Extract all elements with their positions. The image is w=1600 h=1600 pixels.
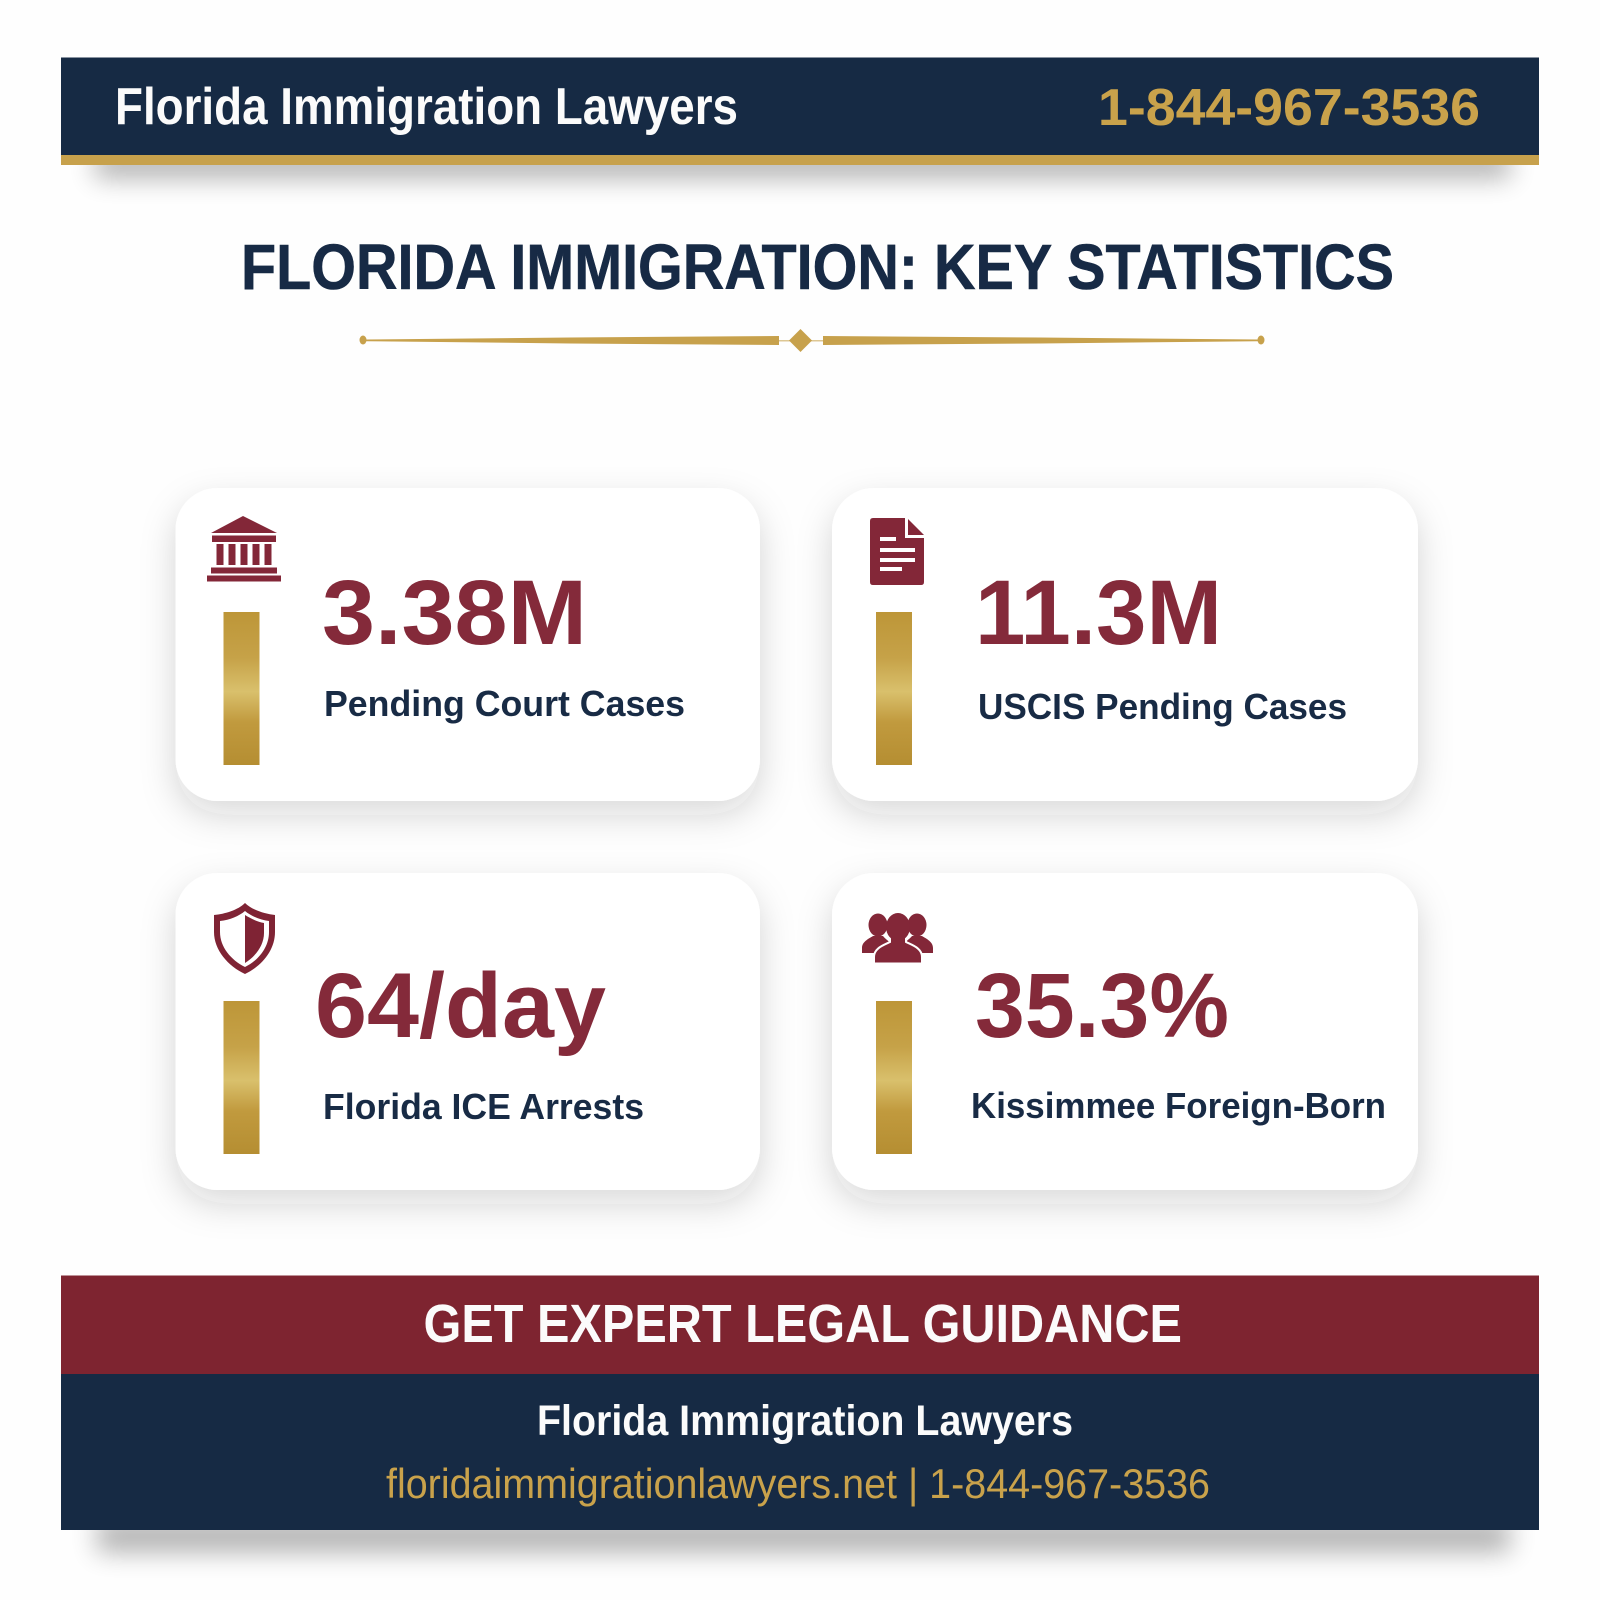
panel: Kissimmee foreign-born bbox=[832, 873, 1418, 1190]
website and phone: floridaimmigrationlawyers.net | 1-844-967-3536 bbox=[386, 1460, 1210, 1507]
statistic label: USCIS Pending Cases bbox=[978, 686, 1347, 727]
footer firm name: Florida Immigration Lawyers bbox=[537, 1397, 1073, 1445]
icon: shield bbox=[214, 903, 275, 974]
footer call to action bbox=[61, 1276, 1539, 1552]
gold accent bar bbox=[876, 1001, 912, 1154]
gold accent bar bbox=[876, 612, 912, 765]
statistic value: 64/day bbox=[315, 955, 606, 1057]
icon: people group bbox=[862, 913, 933, 964]
statistic value: 35.3% bbox=[975, 955, 1229, 1057]
red CTA band bbox=[61, 1276, 1539, 1374]
header band bbox=[61, 58, 1539, 178]
gold accent bar bbox=[224, 612, 260, 765]
panel: USCIS pending cases bbox=[832, 488, 1418, 801]
CTA heading: GET EXPERT LEGAL GUIDANCE bbox=[424, 1294, 1182, 1354]
icon: courthouse bbox=[207, 516, 281, 582]
statistic label: Florida ICE Arrests bbox=[323, 1086, 644, 1127]
header phone number: 1-844-967-3536 bbox=[1098, 79, 1480, 137]
panel: Florida ICE arrests bbox=[176, 873, 760, 1190]
navy contact band bbox=[61, 1374, 1539, 1530]
statistic label: Pending Court Cases bbox=[324, 683, 685, 724]
gold accent bar bbox=[224, 1001, 260, 1154]
main title: FLORIDA IMMIGRATION: KEY STATISTICS bbox=[241, 231, 1394, 303]
title divider ornament bbox=[360, 329, 1264, 352]
panel: pending court cases bbox=[176, 488, 760, 801]
statistic value: 11.3M bbox=[975, 562, 1222, 664]
statistic value: 3.38M bbox=[322, 562, 587, 664]
header firm name: Florida Immigration Lawyers bbox=[115, 78, 738, 136]
statistic label: Kissimmee Foreign-Born bbox=[971, 1085, 1386, 1126]
icon: document bbox=[870, 518, 924, 585]
